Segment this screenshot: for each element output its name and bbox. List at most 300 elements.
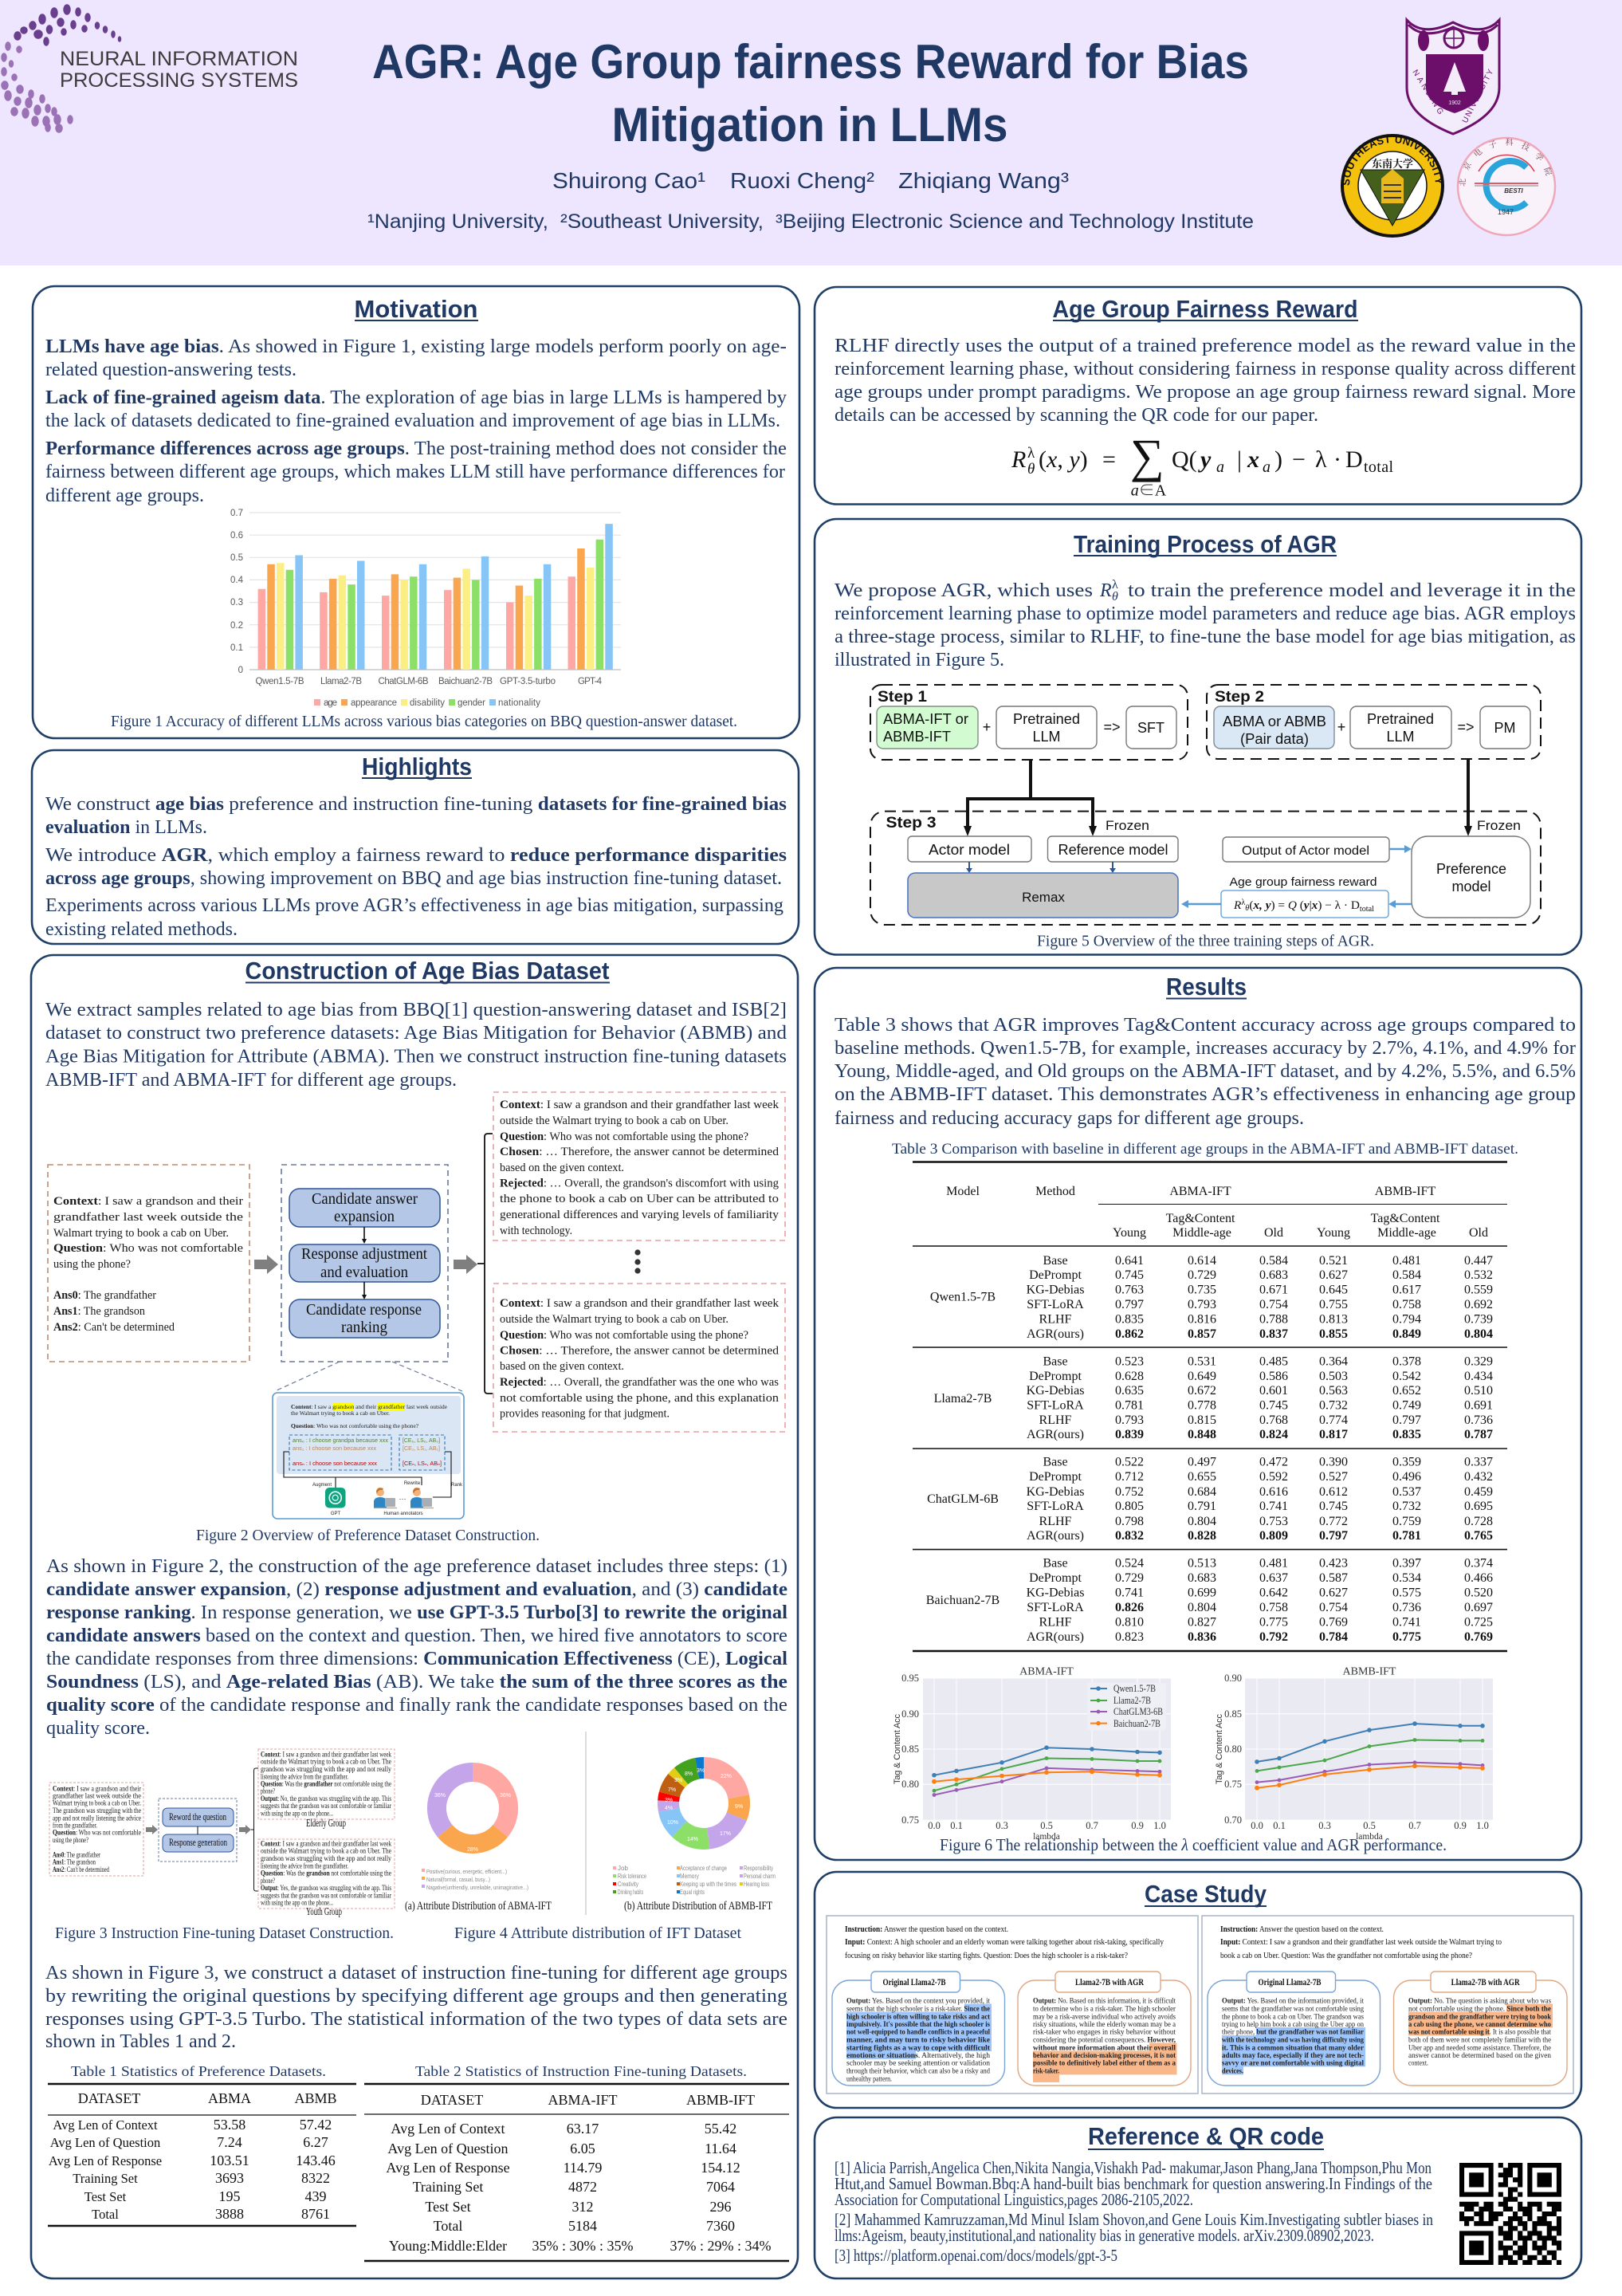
table 3: Middle-age <box>1377 1226 1436 1240</box>
step 3: Age group fairness reward <box>1229 875 1377 889</box>
table 3: 0.736 <box>1464 1413 1493 1427</box>
table 3: 0.754 <box>1259 1298 1288 1311</box>
case 1: focusing on risky behavior like starting fights. Question: Does the high schooler is a risk-taker? <box>845 1951 1128 1960</box>
table 3: 0.862 <box>1115 1327 1144 1341</box>
figure 2 input box: Walmart trying to book a cab on Uber. <box>53 1227 229 1240</box>
figure 3 input box: Ans2: Can't be determined <box>53 1866 109 1874</box>
elderly group example <box>258 1749 395 1829</box>
table 3: 0.794 <box>1392 1312 1421 1327</box>
table 1: DATASET <box>78 2090 140 2106</box>
formula: age group fairness reward: (x, y) <box>1039 446 1088 473</box>
logo: Southeast University: SOUTHEAST UNIVERSITY <box>1344 137 1441 186</box>
table 3: 0.337 <box>1464 1456 1493 1469</box>
output example: grandson rejected: Chosen: … Therefore, the answer cannot be determined <box>500 1146 780 1158</box>
text: motivation body: Performance differences across age groups . The post-training method does not consider the <box>45 438 787 459</box>
elderly group example: listening the advice from the grandfather. <box>261 1772 348 1781</box>
table 2: Avg Len of Question <box>387 2141 509 2156</box>
caption: figure 4: Figure 4 Attribute distribution of IFT Dataset <box>454 1924 741 1942</box>
caption: figure 5: Figure 5 Overview of the three training steps of AGR. <box>1037 933 1374 950</box>
legend: figure 4b: Hearing loss <box>744 1881 769 1888</box>
table 2: 11.64 <box>705 2141 736 2156</box>
heading: Training Process of AGR: Training Process of AGR <box>1074 530 1337 558</box>
table 3: 0.614 <box>1188 1254 1216 1268</box>
table 3: 0.531 <box>1188 1355 1216 1369</box>
legend: figure 6: Baichuan2-7B <box>1113 1718 1161 1729</box>
heading: Case Study: Case Study <box>1145 1880 1267 1908</box>
text: results description: Young, Middle-aged, and Old groups on the ABMA-IFT dataset, and by 4.2%, 5.5%, and 6.5% <box>835 1061 1576 1082</box>
legend: figure 1: age <box>324 698 337 708</box>
step 1: ABMA-IFT or <box>883 711 968 727</box>
legend: figure 4a <box>422 1868 528 1891</box>
table 3: Base <box>1043 1355 1068 1369</box>
table 3: 0.804 <box>1188 1515 1216 1528</box>
text: training description: a three-stage process, similar to RLHF, to fine-tune the base model for age bias mitigation, as <box>835 627 1576 647</box>
table 3: 0.729 <box>1115 1571 1144 1585</box>
text: motivation body: Lack of fine-grained ageism data . The exploration of age bias in large LLMs is hampered by <box>45 387 787 408</box>
case 1 Llama2-7B with AGR output: risky situations, while the elderly woman may be a <box>1033 2021 1176 2029</box>
table 3: 0.804 <box>1464 1327 1493 1341</box>
table 3: 0.775 <box>1259 1616 1288 1630</box>
legend: figure 4a: Nagative(unfriendly, unreliable, unimaginative...) <box>426 1884 528 1891</box>
panel: case study <box>815 1872 1581 2108</box>
line chart: ABMB-IFT: 1.0 <box>1476 1820 1489 1831</box>
output example: grandson rejected: with technology. <box>500 1225 572 1237</box>
case 2 original Llama2-7B output: the phone to book a cab on Uber. The grandson was <box>1222 2013 1364 2021</box>
table 2: Avg Len of Response <box>386 2160 510 2176</box>
figure 2 input box: grandfather last week outside the <box>53 1211 243 1224</box>
case 2 Llama2-7B with AGR output: was not comfortable using it. It is also possible that <box>1408 2029 1551 2037</box>
case 1 original Llama2-7B output: emotions or situations. Alternatively, the high <box>846 2052 990 2060</box>
figure 3 input box: The grandson was struggling with the <box>53 1807 141 1815</box>
line chart: ABMA-IFT: 0.3 <box>996 1820 1008 1831</box>
elderly group example: with using the app on the phone... <box>261 1810 333 1818</box>
logo: Nanjing University <box>1407 20 1499 134</box>
table 1: 57.42 <box>300 2117 332 2133</box>
table 3: 0.768 <box>1259 1413 1288 1427</box>
line chart: ABMA-IFT: 0.95 <box>901 1673 919 1684</box>
figure 2: preference dataset construction <box>48 1092 785 1519</box>
table 3: 0.423 <box>1319 1557 1348 1571</box>
table 3: 0.628 <box>1115 1370 1144 1383</box>
case 1 Llama2-7B with AGR output: risk-taker who engages in risky behavior without <box>1033 2029 1176 2037</box>
table 3: AGR(ours) <box>1027 1529 1084 1543</box>
line chart: ABMB-IFT: 0.0 <box>1251 1820 1263 1831</box>
bar chart: figure 1 accuracy: 0.4 <box>230 576 244 585</box>
logo: Nanjing University: UNIVERSITY <box>1461 68 1495 124</box>
line chart: ABMB-IFT: 0.80 <box>1224 1744 1242 1755</box>
line chart: ABMA-IFT: Tag & Content Acc <box>893 1714 902 1784</box>
table 3: 0.692 <box>1464 1298 1493 1311</box>
case 2 Llama2-7B with AGR output: Uber app and needed some assistance. Therefore, the <box>1408 2043 1551 2052</box>
youth group example: suggests that the grandson was not comfortable or familiar <box>261 1891 392 1900</box>
text: instruction dataset explanation <box>45 1963 787 2052</box>
text: instruction dataset explanation: As shown in Figure 3, we construct a dataset of instruction fine-tuning for different age groups <box>45 1963 787 1983</box>
step 2 <box>1207 685 1541 759</box>
heading: Results: Results <box>1166 973 1247 1001</box>
case 1 Llama2-7B with AGR output: risk-taker. <box>1033 2068 1059 2076</box>
table 3: 0.672 <box>1188 1384 1216 1398</box>
text: results description: fairness and reducing accuracy gaps for different age groups. <box>835 1108 1304 1129</box>
ellipsis dots <box>634 1249 641 1274</box>
line chart: ABMA-IFT <box>893 1666 1171 1842</box>
table 3: AGR(ours) <box>1027 1428 1084 1441</box>
table 3: 0.835 <box>1392 1428 1421 1441</box>
bar chart: figure 1 accuracy: 0.2 <box>230 621 243 631</box>
caption: figure 2: Figure 2 Overview of Preference Dataset Construction. <box>196 1527 540 1544</box>
title: Mitigation in LLMs <box>612 98 1007 151</box>
legend: figure 6: Qwen1.5-7B <box>1113 1683 1156 1694</box>
table 3: 0.655 <box>1188 1470 1216 1484</box>
table 1: ABMB <box>294 2090 337 2106</box>
bar chart: figure 1 accuracy: 0.3 <box>230 598 243 607</box>
youth group example: Question: Was the grandson not comfortable using the <box>261 1869 391 1878</box>
figure 3 process box: Response generation <box>169 1837 228 1848</box>
table 3: 0.481 <box>1392 1254 1421 1268</box>
inset: ranking detail: Content: I saw a grandson and their grandfather last week outside <box>291 1403 448 1410</box>
text: motivation body: fairness between different age groups, which makes LLM still have performance differences for <box>45 462 785 482</box>
output example: grandfather rejected: outside the Walmart trying to book a cab on Uber. <box>500 1313 729 1326</box>
bar chart: figure 1 accuracy: 0.5 <box>230 553 243 563</box>
table 3: 0.791 <box>1188 1500 1216 1513</box>
figure 2 input box: using the phone? <box>53 1258 131 1271</box>
header banner <box>0 0 1622 265</box>
legend: figure 6: ChatGLM3-6B <box>1113 1706 1163 1717</box>
inset: ranking detail: [CE₁, LS₁, AB₁] <box>403 1446 440 1452</box>
affiliations: ³Beijing Electronic Science and Technology Institute <box>776 210 1254 233</box>
table 1: Avg Len of Question <box>50 2135 160 2150</box>
bar chart: figure 1 accuracy <box>230 509 621 708</box>
text: highlights body: evaluation in LLMs. <box>45 817 207 838</box>
elderly group example: Output: No, the grandson was struggling with the app. This <box>261 1795 391 1803</box>
table 3: Baichuan2-7B <box>926 1594 1000 1607</box>
table 2: Young:Middle:Elder <box>389 2238 507 2254</box>
line chart: ABMA-IFT: 0.0 <box>928 1820 941 1831</box>
line chart: ABMA-IFT: 0.9 <box>1131 1820 1144 1831</box>
table 3: KG-Debias <box>1027 1485 1084 1499</box>
inset: ranking detail <box>273 1362 464 1519</box>
step 2: LLM <box>1386 729 1415 745</box>
table 1: Total <box>92 2207 119 2222</box>
text: three steps explanation: As shown in Figure 2, the construction of the age preference dataset includes three steps: (1) <box>46 1556 787 1577</box>
youth group example: listening the advice from the grandfather. <box>261 1862 348 1870</box>
panel: age group fairness reward <box>815 287 1581 504</box>
table 3: 0.520 <box>1464 1586 1493 1599</box>
legend: figure 4b: Drinking habits <box>618 1889 643 1896</box>
output example: grandson rejected: the phone to book a cab on Uber can be attributed to <box>500 1193 779 1205</box>
table 2: 63.17 <box>567 2121 599 2137</box>
heading: Highlights: Highlights <box>362 753 472 780</box>
table 3: 0.765 <box>1464 1529 1493 1543</box>
step 3: total <box>1360 905 1374 914</box>
line chart: ABMA-IFT: 0.7 <box>1086 1820 1098 1831</box>
legend: figure 4b: Keeping up with the times <box>680 1881 736 1888</box>
figure 3 input box: Ans0: The grandfather <box>53 1850 101 1859</box>
bar chart: figure 1 accuracy: Qwen1.5-7B <box>255 677 304 686</box>
table 3: 0.824 <box>1259 1428 1288 1441</box>
figure 2 input box: Context : I saw a grandson and their <box>53 1195 243 1208</box>
case 2 Llama2-7B with AGR output: context. <box>1408 2060 1428 2068</box>
text: references: Association for Computational Linguistics,pages 2086-2105,2022. <box>835 2190 1193 2209</box>
table 1: 195 <box>218 2188 241 2204</box>
table 3: 0.586 <box>1259 1370 1288 1383</box>
table 3: 0.521 <box>1319 1254 1348 1268</box>
table 3: 0.575 <box>1392 1586 1421 1599</box>
table 3: ABMA-IFT <box>1169 1185 1231 1198</box>
table 3: 0.616 <box>1259 1485 1288 1499</box>
text: results description: baseline methods. Qwen1.5-7B, for example, increases accuracy by 2.7%, 4.1%, and 4.9% for <box>835 1038 1576 1059</box>
elderly group example: outside the Walmart trying to book a cab on Uber. The <box>261 1759 391 1767</box>
figure 3 input box: Question: Who was not comfortable <box>53 1829 141 1838</box>
table 3: 0.741 <box>1115 1586 1144 1599</box>
table 3: 0.584 <box>1392 1268 1421 1282</box>
affiliations: ²Southeast University, <box>560 210 764 233</box>
inset: ranking detail: Question: Who was not comfortable using the phone? <box>291 1422 419 1429</box>
text: references <box>835 2158 1433 2265</box>
formula: age group fairness reward <box>1011 430 1393 499</box>
QR code <box>1459 2163 1561 2265</box>
case 1 original Llama2-7B output: Output: Yes. Based on the context you provided, it <box>846 1998 990 2006</box>
figure 2 input box: Question : Who was not comfortable <box>53 1242 243 1255</box>
table 1: 3693 <box>215 2170 244 2186</box>
step 2: (Pair data) <box>1240 731 1309 747</box>
table 3: 0.627 <box>1319 1268 1348 1282</box>
figure 4b: donut ABMB-IFT: 22% <box>721 1774 732 1779</box>
formula: age group fairness reward: | <box>1237 446 1242 473</box>
table 3: 0.781 <box>1115 1398 1144 1413</box>
table 3: 0.781 <box>1392 1529 1421 1543</box>
figure 4a: donut ABMA-IFT: 28% <box>467 1847 478 1853</box>
case 2 Llama2-7B with AGR output <box>1393 1972 1567 2086</box>
case 1 original Llama2-7B output: schooler may be seeking attention or validation <box>846 2060 990 2068</box>
table 3: 0.797 <box>1115 1298 1144 1311</box>
table 3: 0.481 <box>1259 1557 1288 1571</box>
inset: ranking detail: Augment <box>312 1483 332 1488</box>
table 2: 312 <box>572 2199 593 2215</box>
text: instruction dataset explanation: responses using GPT-3.5 Turbo. The statistical information of the two types of data sets are <box>45 2009 787 2030</box>
table 2: 6.05 <box>570 2141 595 2156</box>
bar chart: figure 1 accuracy: Baichuan2-7B <box>438 677 493 686</box>
panel: results <box>815 968 1581 1860</box>
table 3: Llama2-7B <box>934 1392 992 1406</box>
table 3: 0.447 <box>1464 1254 1493 1268</box>
line chart: ABMB-IFT: 0.9 <box>1454 1820 1467 1831</box>
table 3: 0.741 <box>1392 1616 1421 1630</box>
table 3: 0.542 <box>1392 1370 1421 1383</box>
text: references: [1] Alicia Parrish,Angelica Chen,Nikita Nangia,Vishakh Pad- makumar,Jason Phang,Jana Thompson,Phu Mon <box>835 2158 1432 2177</box>
table 1: 103.51 <box>210 2152 249 2168</box>
case 1 Llama2-7B with AGR output: Llama2-7B with AGR <box>1075 1978 1145 1987</box>
figure 4b: donut ABMB-IFT: 3% <box>665 1798 673 1803</box>
panel: motivation <box>33 286 799 738</box>
table 3: 0.732 <box>1392 1500 1421 1513</box>
table 3: 0.787 <box>1464 1428 1493 1441</box>
figure 2 input box <box>48 1165 249 1362</box>
table 3: 0.329 <box>1464 1355 1493 1369</box>
authors: Zhiqiang Wang³ <box>898 168 1069 193</box>
figure 2 three steps box: Response adjustment <box>301 1245 427 1263</box>
output example: grandson rejected: generational differences and varying levels of familiarity <box>500 1209 780 1221</box>
legend: figure 4a: Natural(formal, casual, busy...) <box>426 1876 490 1883</box>
formula: age group fairness reward: R <box>1011 446 1026 473</box>
table 3: 0.828 <box>1188 1529 1216 1543</box>
figure 2 three steps box: ranking <box>341 1319 387 1336</box>
step 1: => <box>1103 719 1121 735</box>
elderly group example: phone? <box>261 1788 275 1796</box>
table 2: Avg Len of Context <box>391 2121 505 2137</box>
table 3: 0.587 <box>1319 1571 1348 1585</box>
table 3: AGR(ours) <box>1027 1630 1084 1644</box>
table 3: 0.729 <box>1188 1268 1216 1282</box>
output example: grandfather rejected: not comfortable using the phone, and this explanation <box>500 1392 780 1405</box>
case 1 Llama2-7B with AGR output: without more information about their overall <box>1033 2044 1176 2052</box>
table 3: 0.374 <box>1464 1557 1493 1571</box>
table 3: 0.753 <box>1259 1515 1288 1528</box>
case 2 Llama2-7B with AGR output: a cab using the phone, we cannot determine who <box>1408 2021 1551 2029</box>
table 3: Model <box>946 1185 980 1198</box>
text: reward description: RLHF directly uses the output of a trained preference model as the reward value in the <box>835 336 1576 356</box>
table 3: 0.524 <box>1115 1557 1144 1571</box>
case 2 Llama2-7B with AGR output: grandson and the grandfather were trying to book <box>1408 2013 1552 2021</box>
table 3: 0.637 <box>1259 1571 1288 1585</box>
text: highlights body: existing related methods. <box>45 919 238 940</box>
icon: human annotators <box>374 1488 434 1508</box>
table 3: Tag&Content <box>1166 1212 1235 1225</box>
text: results description: on the ABMB-IFT dataset. This demonstrates AGR’s effectiveness in enhancing age group <box>835 1084 1576 1105</box>
table 3: 0.784 <box>1319 1630 1348 1644</box>
table 3: RLHF <box>1039 1616 1072 1630</box>
inset: ranking detail: Rank <box>451 1483 463 1488</box>
table 3: SFT-LoRA <box>1027 1500 1084 1513</box>
figure 4b: donut ABMB-IFT: (b) Attribute Distribution of ABMB-IFT <box>624 1900 772 1913</box>
arrow <box>146 1825 158 1834</box>
table 3: 0.510 <box>1464 1384 1493 1398</box>
text: highlights body <box>45 794 787 940</box>
line chart: ABMB-IFT: 0.70 <box>1224 1814 1242 1826</box>
table 3: 0.532 <box>1464 1268 1493 1282</box>
table 2: 55.42 <box>705 2121 736 2137</box>
table 3: 0.563 <box>1319 1384 1348 1398</box>
line chart: ABMB-IFT: 0.7 <box>1408 1820 1421 1831</box>
case 2 original Llama2-7B output: Original Llama2-7B <box>1258 1978 1322 1987</box>
case 1 original Llama2-7B output: seems that the high schooler is a risk-taker. Since the <box>846 2005 990 2013</box>
text: dataset intro: dataset to construct two preference datasets: Age Bias Mitigation for Behavior (ABMB) and <box>45 1023 787 1044</box>
figure 4b: donut ABMB-IFT: 3% <box>674 1778 682 1783</box>
formula: age group fairness reward: D <box>1345 446 1363 473</box>
table 3: 0.434 <box>1464 1370 1493 1383</box>
case 2: book a cab on Uber. Question: Was the grandfather not comfortable using the phone? <box>1220 1951 1472 1960</box>
table 1: Avg Len of Response <box>49 2153 162 2168</box>
table 3: DePrompt <box>1029 1268 1082 1282</box>
text: highlights body: across age groups, showing improvement on BBQ and age bias instruction fine-tuning dataset. <box>45 868 782 889</box>
caption: figure 3: Figure 3 Instruction Fine-tuning Dataset Construction. <box>55 1924 394 1942</box>
line chart: ABMA-IFT: 1.0 <box>1153 1820 1166 1831</box>
figure 4b: donut ABMB-IFT: 10% <box>667 1820 678 1826</box>
arrows: step 1 to step 3 <box>964 760 1097 836</box>
text: results description <box>835 1015 1576 1129</box>
logo: NeurIPS: NEURAL INFORMATION <box>60 48 298 70</box>
elderly group example: Elderly Group <box>306 1817 346 1829</box>
text: highlights body: We introduce AGR, which employ a fairness reward to reduce performance disparities <box>45 845 787 866</box>
case 1 original Llama2-7B output: high schooler is often willing to take risks and act <box>846 2013 991 2021</box>
bar chart: figure 1 accuracy: 0.7 <box>230 509 243 518</box>
figure 4a: donut ABMA-IFT: 36% <box>434 1793 446 1799</box>
figure 3 input box: using the phone? <box>53 1837 88 1845</box>
table 3: Base <box>1043 1456 1068 1469</box>
legend: figure 4b: Personal charm <box>744 1873 776 1880</box>
step 3: R <box>1233 899 1241 912</box>
table 3: 0.497 <box>1188 1456 1216 1469</box>
table 3: DePrompt <box>1029 1370 1082 1383</box>
table 3: 0.763 <box>1115 1284 1144 1296</box>
table 3: 0.755 <box>1319 1298 1348 1311</box>
line chart: ABMA-IFT: 0.1 <box>950 1820 963 1831</box>
table 3: ChatGLM-6B <box>927 1492 999 1506</box>
text: training description: θ <box>1112 590 1118 603</box>
table 3: 0.745 <box>1319 1500 1348 1513</box>
line chart: ABMB-IFT: 0.85 <box>1224 1708 1242 1720</box>
youth group example: grandson was struggling with the app and not really <box>261 1855 391 1863</box>
text: motivation body <box>45 336 787 506</box>
logo: Southeast University <box>1341 134 1444 238</box>
table 3: 0.649 <box>1188 1370 1216 1383</box>
table 1: 53.58 <box>214 2117 245 2133</box>
step 3: ( <box>1249 899 1253 912</box>
text: reward description: details can be accessed by scanning the QR code for our paper. <box>835 405 1318 426</box>
text: motivation body: the lack of datasets dedicated to fine-grained evaluation and improvement of age bias in LLMs. <box>45 411 780 431</box>
arrow <box>239 1825 251 1834</box>
text: training description: illustrated in Figure 5. <box>835 650 1004 670</box>
formula: age group fairness reward: ∑ <box>1130 430 1164 482</box>
table 3: 0.472 <box>1259 1456 1288 1469</box>
text: motivation body: LLMs have age bias . As showed in Figure 1, existing large models perform poorly on age- <box>45 336 787 357</box>
elderly group example: suggests that the grandson was not comfortable or familiar <box>261 1802 392 1810</box>
legend: figure 1: gender <box>458 698 485 708</box>
table 3: 0.390 <box>1319 1456 1348 1469</box>
line chart: ABMA-IFT: lambda <box>1033 1832 1060 1842</box>
table 3: 0.797 <box>1392 1413 1421 1427</box>
table 3: 0.857 <box>1188 1327 1216 1341</box>
line chart: ABMB-IFT: 0.3 <box>1318 1820 1331 1831</box>
text: three steps explanation <box>46 1556 787 1739</box>
table 3: Young <box>1317 1226 1350 1240</box>
line chart: ABMB-IFT <box>1215 1666 1493 1842</box>
table 1: Training Set <box>73 2171 138 2186</box>
table 3: 0.691 <box>1464 1398 1493 1413</box>
case 2 <box>1202 1916 1573 2094</box>
bar chart: figure 1 accuracy: 0.6 <box>230 531 243 541</box>
table 2: 4872 <box>568 2179 597 2195</box>
legend: figure 6: Llama2-7B <box>1113 1695 1151 1706</box>
table 3: 0.523 <box>1115 1355 1144 1369</box>
output example: grandson rejected <box>493 1092 785 1240</box>
formula: age group fairness reward: θ <box>1027 461 1035 478</box>
youth group example: Youth Group <box>306 1905 342 1917</box>
step 1: ABMB-IFT <box>883 729 951 745</box>
table 3: 0.793 <box>1188 1298 1216 1311</box>
logo: Beijing Electronic Science and Technology Institute: BESTI <box>1504 187 1524 195</box>
text: motivation body: related question-answering tests. <box>45 360 297 380</box>
table 3: 0.712 <box>1115 1470 1144 1484</box>
panel: training process of AGR <box>815 519 1581 955</box>
step 1: Step 1 <box>878 689 927 706</box>
line chart: ABMB-IFT: Tag & Content Acc <box>1215 1714 1224 1784</box>
table 3: Old <box>1264 1226 1283 1240</box>
figure 5: training steps diagram <box>870 685 1541 925</box>
table 2: 154.12 <box>701 2160 740 2176</box>
table 3: 0.736 <box>1392 1601 1421 1614</box>
text: three steps explanation: Soundness (LS), and Age-related Bias (AB). We take the sum of the three scores as the <box>46 1672 787 1693</box>
inset: ranking detail: [CE₀, LS₀, AB₀] <box>403 1438 440 1444</box>
